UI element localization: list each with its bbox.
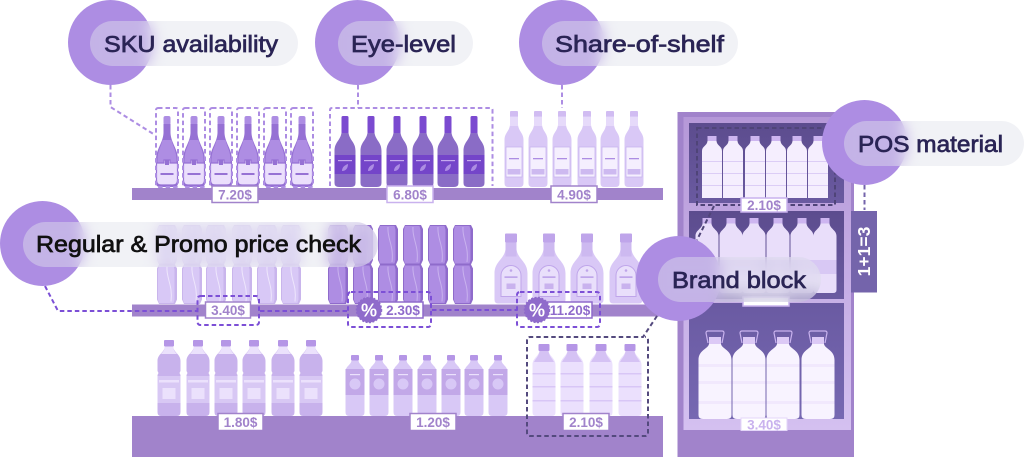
promo price 11.20 with badge: 11.20$: [550, 303, 591, 318]
price 3.40 tag with dashed box: [198, 296, 259, 325]
promo price 11.20 with badge: [517, 292, 600, 327]
top shelf: [132, 188, 663, 200]
callout: Brand block: [636, 236, 820, 321]
eye-level bottles: [334, 116, 484, 187]
POS sign 1+1=3: 1+1=3: [854, 226, 874, 276]
promo price 2.30 with badge: 2.30$: [386, 303, 420, 318]
brand block bottles bottom shelf: [532, 344, 642, 416]
top shelf price tags: 6.80$: [393, 188, 427, 202]
promo price 2.30 with badge: [348, 292, 431, 327]
callout: Regular and Promo price check: [0, 201, 378, 286]
promo price 2.30 with badge: %: [361, 300, 377, 320]
small bottles bottom shelf: [346, 355, 508, 416]
large bottles bottom shelf: [158, 340, 322, 416]
text: SKU availability: [104, 31, 279, 57]
fridge water jugs: [698, 331, 834, 419]
text: Eye-level: [351, 31, 456, 57]
fridge price tags: 3.40$: [747, 418, 781, 432]
POS connector line: [864, 185, 866, 210]
middle shelf: [132, 304, 663, 316]
promo price 11.20 with badge: %: [529, 300, 545, 320]
connector lines to top callouts: [110, 85, 562, 135]
callout: POS material: [822, 100, 1024, 185]
fridge top row bottles: [702, 136, 828, 198]
bottom shelf price tags: 2.10$: [569, 415, 603, 430]
bottom shelf price tags: 1.80$: [224, 415, 258, 430]
text: Share-of-shelf: [555, 31, 725, 57]
fridge price tags: 2.10$: [747, 198, 781, 213]
text: POS material: [858, 131, 1003, 157]
bottom shelf price tags: 1.20$: [416, 415, 450, 430]
bottom shelf: [132, 416, 663, 457]
callout: Eye-level: [315, 0, 473, 85]
fridge brand block dashed box: [697, 128, 835, 240]
fridge price tags: [741, 198, 789, 432]
bottom shelf price tags: [218, 414, 609, 430]
light cans: [157, 225, 301, 304]
callout: SKU availability: [68, 0, 298, 85]
fridge middle row bottles: [696, 218, 836, 293]
SKU availability dashed boxes: [156, 108, 313, 187]
champagne bottles: [156, 116, 313, 187]
brand block dashed box and connector: [527, 316, 657, 436]
text: Brand block: [672, 267, 807, 293]
share-of-shelf bottles: [504, 111, 644, 187]
top shelf price tags: 4.90$: [557, 188, 591, 202]
top shelf price tags: 7.20$: [218, 188, 252, 202]
regular and promo connector line: [45, 286, 517, 311]
eye-level dashed bracket: [330, 108, 492, 186]
top shelf price tags: [212, 186, 597, 202]
whisky bottles: [494, 234, 642, 304]
text: Regular & Promo price check: [36, 231, 362, 257]
POS sign 1+1=3: [851, 211, 877, 292]
price 3.40 tag with dashed box: 3.40$: [211, 303, 245, 318]
fridge: [678, 112, 854, 457]
dark cans: [328, 225, 473, 304]
callout: Share-of-shelf: [519, 0, 738, 85]
